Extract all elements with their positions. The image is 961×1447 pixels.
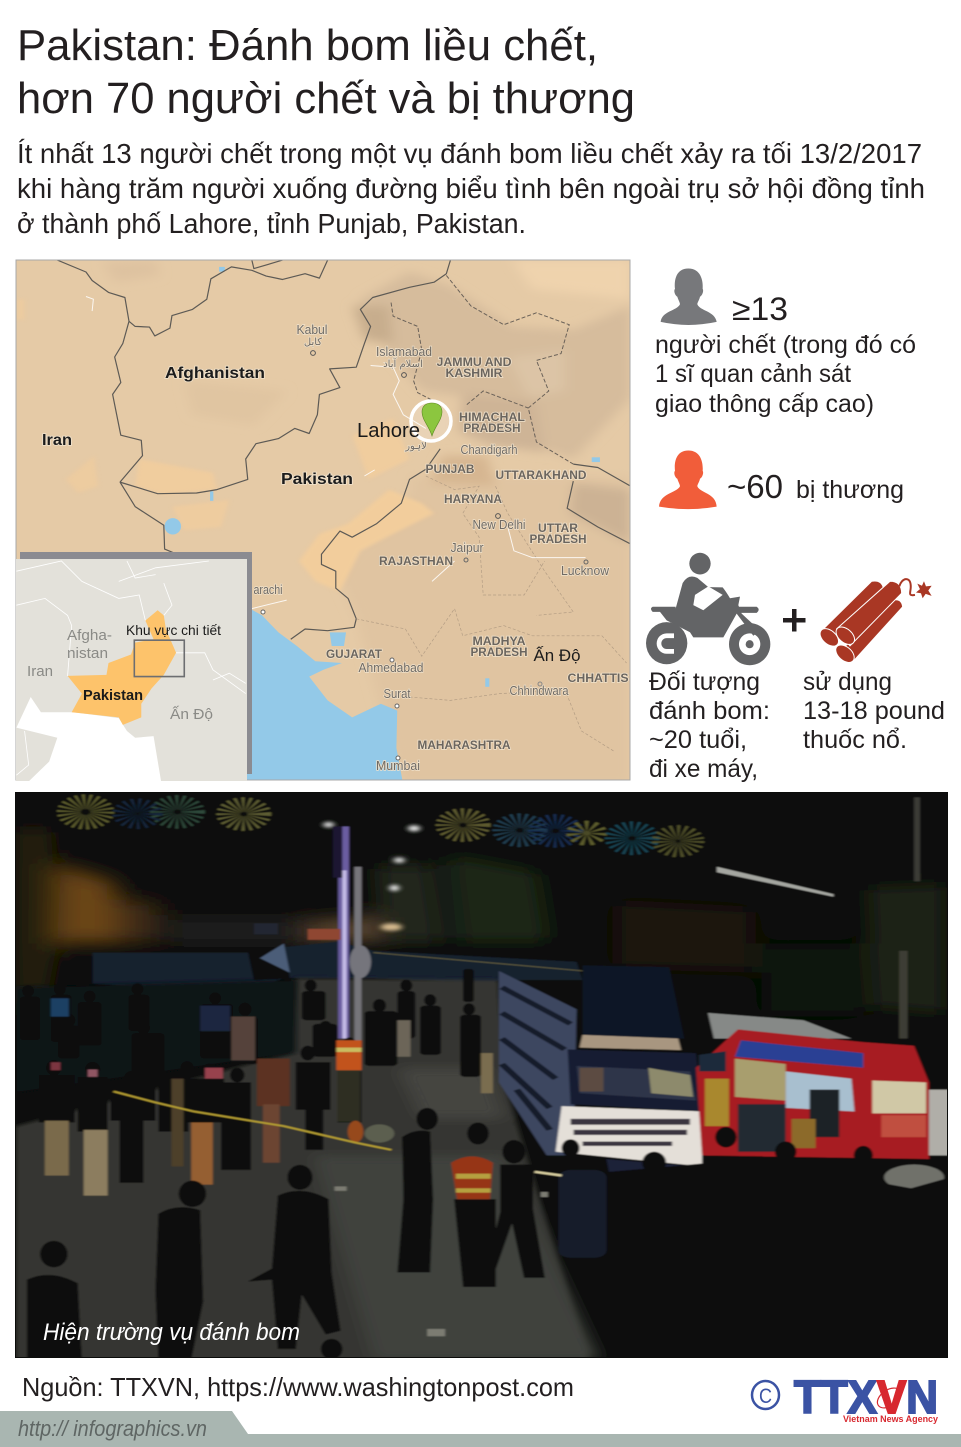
map labels: اسلام آباد — [383, 357, 423, 370]
map labels: CHHATTIS — [568, 673, 629, 685]
text: attacker: đánh bom: — [649, 697, 770, 725]
map labels: Islamabad — [376, 345, 432, 359]
footer band — [0, 1411, 961, 1447]
stat: injured: ~60 — [727, 468, 783, 505]
map labels: كابل — [304, 337, 322, 348]
text: attacker: đi xe máy, — [649, 755, 758, 783]
text: explosive — [803, 668, 945, 754]
text: attacker: Đối tượng — [649, 668, 760, 696]
panel: attacker — [646, 553, 945, 783]
logo: TTXVN: Vietnam News Agency — [843, 1414, 939, 1425]
icon: dynamite — [817, 579, 932, 666]
map labels: Ấn Độ — [534, 646, 580, 665]
text: attacker: ~20 tuổi, — [649, 726, 747, 754]
inset locator map: Pakistan — [83, 688, 143, 704]
title: hơn 70 người chết và bị thương — [17, 74, 635, 123]
text: explosive: thuốc nổ. — [803, 726, 907, 754]
map labels: JAMMU AND — [436, 357, 512, 369]
icon: motorbike rider — [646, 553, 770, 665]
source: Nguồn: TTXVN, https://www.washingtonpost.com — [22, 1372, 574, 1402]
intro text: khi hàng trăm người xuống đường biểu tình bên ngoài trụ sở hội đồng tỉnh — [17, 173, 925, 204]
inset locator map: Iran — [27, 663, 53, 680]
map labels: PRADESH — [530, 534, 586, 546]
logo: TTXVN: C — [759, 1385, 772, 1408]
intro text: ở thành phố Lahore, tỉnh Punjab, Pakistan. — [17, 208, 526, 239]
text: dead detail — [655, 331, 916, 418]
text: explosive: 13-18 pound — [803, 697, 945, 725]
text: dead detail: giao thông cấp cao) — [655, 390, 874, 418]
inset locator map: Afgha- — [67, 627, 112, 644]
text: dead detail: 1 sĩ quan cảnh sát — [655, 360, 851, 388]
map labels: UTTAR — [538, 523, 579, 535]
map labels: Pakistan — [281, 471, 353, 488]
text: explosive: sử dụng — [803, 668, 892, 696]
map labels: Chandigarh — [460, 443, 518, 457]
caption: Hiện trường vụ đánh bom — [43, 1319, 300, 1346]
footer url: http:// infographics.vn — [18, 1416, 207, 1441]
intro text — [17, 138, 925, 239]
map labels: Iran — [42, 432, 72, 449]
map labels: لاہور — [404, 441, 427, 452]
map labels: New Delhi — [472, 518, 526, 532]
inset locator map: nistan — [67, 645, 108, 662]
map labels: Jaipur — [450, 541, 484, 555]
map labels: HIMACHAL — [459, 412, 525, 424]
text: injured: bị thương — [796, 476, 904, 504]
map labels: KASHMIR — [446, 368, 503, 380]
intro text: Ít nhất 13 người chết trong một vụ đánh bom liều chết xảy ra tối 13/2/2017 — [17, 138, 922, 169]
title — [17, 21, 635, 123]
map labels: MADHYA — [472, 636, 526, 648]
title: Pakistan: Đánh bom liều chết, — [17, 21, 598, 70]
map labels: Afghanistan — [165, 365, 265, 382]
map labels: MAHARASHTRA — [418, 740, 510, 752]
map labels: arachi — [254, 583, 282, 597]
map labels: Lucknow — [561, 564, 610, 578]
panel: map — [16, 259, 631, 785]
map labels: Surat — [384, 687, 411, 701]
icon: plus — [783, 609, 806, 632]
map labels — [42, 323, 629, 773]
logo: TTXVN: TTXVN — [794, 1371, 938, 1423]
text: attacker — [649, 668, 770, 783]
map labels: HARYANA — [444, 494, 502, 506]
icon: grey person — [661, 268, 717, 325]
map labels: PUNJAB — [426, 464, 474, 476]
text: dead detail: người chết (trong đó có — [655, 331, 916, 359]
photo: bombing scene — [15, 790, 950, 1360]
map labels: PRADESH — [470, 647, 528, 659]
map labels: RAJASTHAN — [379, 556, 453, 568]
label: Lahore: Lahore — [357, 420, 420, 442]
inset locator map: Ấn Độ — [170, 706, 213, 723]
map labels: UTTARAKHAND — [496, 470, 586, 482]
map labels: GUJARAT — [326, 649, 382, 661]
map labels: PRADESH — [464, 423, 520, 435]
map labels: Mumbai — [376, 759, 420, 773]
marker: Lahore pin — [411, 401, 451, 441]
icon: orange person — [659, 450, 717, 509]
inset locator map: Khu vực chi tiết — [126, 622, 221, 638]
stat: dead: ≥13 — [732, 291, 788, 327]
inset locator map — [16, 552, 252, 785]
map labels: Chhindwara — [510, 684, 569, 698]
map labels: Ahmedabad — [358, 661, 424, 675]
panel: casualties — [655, 268, 916, 509]
map labels: Kabul — [296, 323, 328, 337]
